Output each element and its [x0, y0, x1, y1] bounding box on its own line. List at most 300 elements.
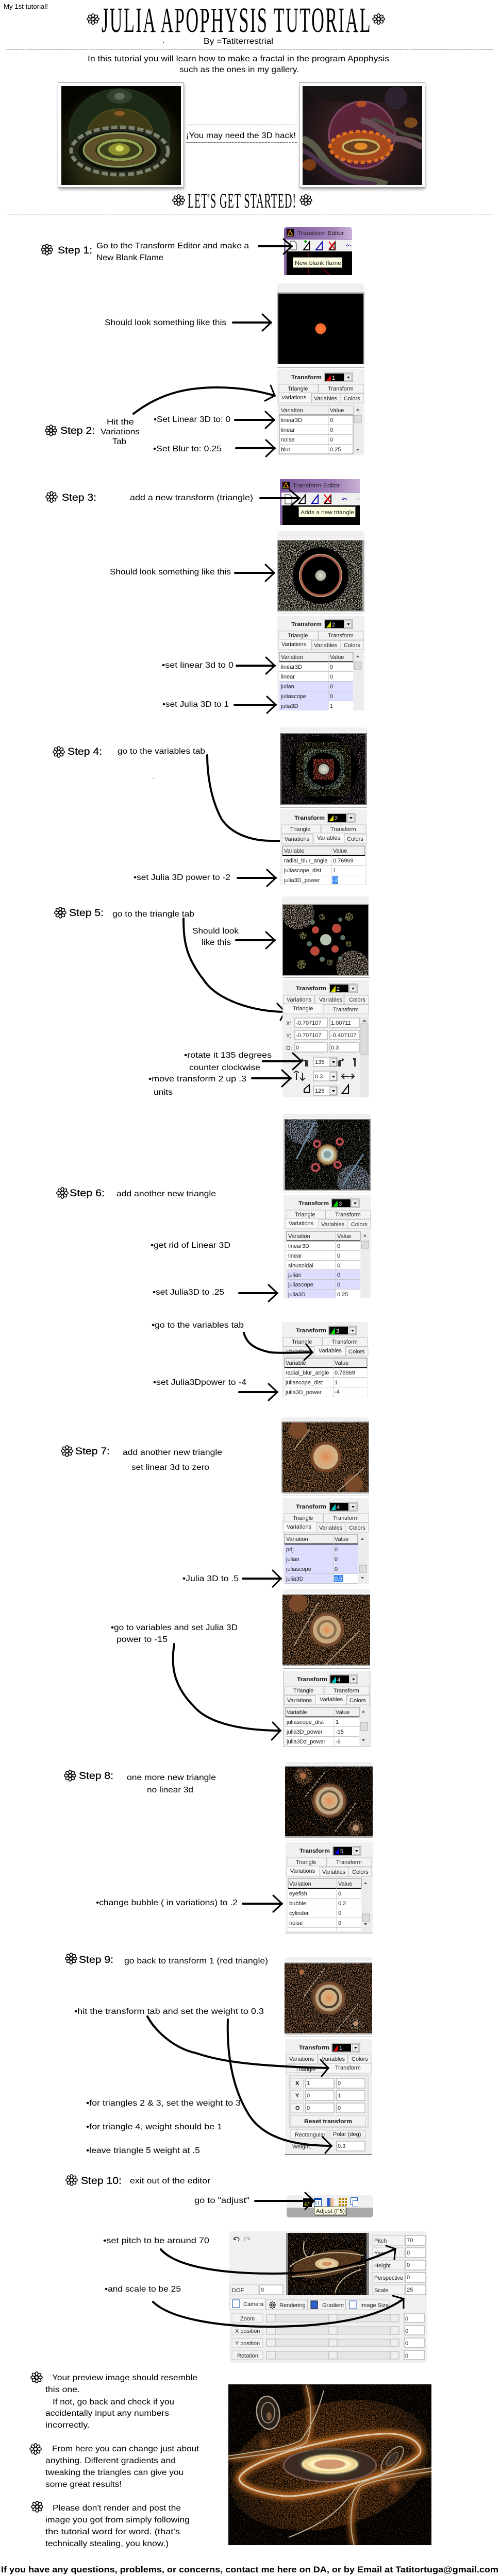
step 1 heading: Step 1: [58, 245, 92, 256]
panel: step 9 preview and transform tab: 0 [307, 2105, 310, 2111]
stray comma: , [163, 39, 164, 44]
panel: step 4 preview and variables: radial_blur_angle [284, 858, 327, 864]
panel: step 5 preview and triangle controls: Transform [333, 1007, 359, 1013]
panel: step 7 second preview and variables: Value [336, 1709, 349, 1716]
arrow: curved to weight field [228, 2020, 331, 2153]
panel: step 1 preview [277, 283, 364, 364]
panel: step 6 variables: Variables [319, 1348, 342, 1354]
panel: step 6 variables [282, 1322, 368, 1398]
panel: step 4 preview and variables: Transform [330, 826, 356, 833]
camera fields: Scale [374, 2287, 389, 2294]
panel: step 6 preview and variations: linear3D [288, 1243, 309, 1249]
stray dot [153, 778, 154, 779]
panel: step 7 preview and variations: Variations [287, 1524, 312, 1530]
panel: step 3 transform controls: Variation [281, 654, 303, 660]
panel: step 2 transform controls: Transform [328, 386, 354, 392]
panel: step 6 preview and variations: juliascope [288, 1282, 313, 1288]
panel: step 2 transform controls: linear [281, 427, 295, 433]
panel: step 9 preview and transform tab: Reset transform [304, 2119, 352, 2125]
step 8 heading: Step 8: [79, 1771, 113, 1782]
panel: step 6 preview and variations: 0 [337, 1243, 340, 1249]
note: please don't render: image you got from simply following [45, 2516, 190, 2524]
panel: step 3 transform controls: juliascope [280, 693, 306, 700]
bullet: rotate 135 degrees: counter clockwise [189, 1063, 260, 1072]
tilde divider: ~~~~~~~~~~~~~~~~~~~~~~~~~~~~~~~~~~~~~~~~~~~~~~~~~~~~~~~~~~~~~~~~~~~~~~~~~~~~~~~~~~~~~~~~~~~~~~~~~~~~~~~~~~~~~~~~~~~~~~~~~~~~~~~~~~~~~~~~~~~~~~~~~~~~~~~~~~~~~~~~ [6, 47, 494, 53]
camera fields: 0 [407, 2262, 410, 2268]
arrow: to rotate button [263, 1053, 302, 1070]
panel: step 3 transform controls: 0 [330, 684, 333, 690]
dialog tabs: Rendering [279, 2302, 306, 2309]
panel: step 8 preview and variations: cylinder [289, 1910, 309, 1917]
camera fields: 0 [407, 2250, 410, 2256]
panel: step 2 transform controls: 0 [330, 437, 333, 443]
preview: adjust fractal [286, 2233, 369, 2295]
panel: step 9 preview and transform tab: Variables [322, 2056, 345, 2062]
camera fields: Perspective [374, 2275, 403, 2281]
arrow: curved to scale field [153, 2296, 404, 2327]
panel: step 8 preview and variations: Variations [290, 1868, 315, 1874]
step 9 heading: Step 9: [79, 1955, 113, 1965]
step 6 heading: Step 6: [70, 1188, 105, 1199]
arrow: to preview [236, 932, 275, 948]
panel: step 8 preview and variations: Transform [299, 1848, 330, 1854]
arrow: to linear3D [237, 657, 275, 674]
arrow: to julia3D power [239, 1384, 277, 1400]
panel: step 2 transform controls [277, 365, 364, 455]
step 1 instruction: New Blank Flame [96, 253, 163, 262]
panel: step 7 preview and variations: Colors [349, 1525, 365, 1531]
note: change anything: tweaking the triangles can give you [45, 2468, 184, 2477]
panel: step 9 preview and transform tab: 1 [307, 2080, 310, 2087]
step 2 note: hit variations tab: Variations [101, 428, 140, 436]
note: preview should resemble: If not, go back and check if you [53, 2398, 174, 2406]
step 7 instruction: set linear 3d to zero [131, 1463, 209, 1472]
panel: step 5 preview and triangle controls: -0.707107 [296, 1032, 322, 1039]
note: preview should resemble: accidentally input any numbers [45, 2409, 169, 2418]
callout: 3D hack note: ¡You may need the 3D hack! [186, 131, 296, 140]
panel: step 9 preview and transform tab: Y [295, 2093, 299, 2099]
panel: step 3 transform controls: 1 [330, 703, 333, 709]
step 3 heading [46, 492, 96, 503]
panel: step 5 preview and triangle controls: 135 [315, 1059, 324, 1065]
sliders: 0 [405, 2328, 408, 2334]
camera fields: 70 [407, 2238, 413, 2244]
panel: step 8 preview and variations: 0 [338, 1910, 341, 1917]
byline: By =Tatiterrestrial [204, 37, 273, 46]
bullet: go to variables tab: •go to the variables tab [152, 1321, 244, 1330]
heading: let's get started: LET'S GET STARTED! [188, 189, 296, 212]
step 4 heading: Step 4: [68, 747, 102, 757]
panel: step 2 transform controls: noise [281, 437, 294, 443]
panel: step 7 second preview and variables: Variables [320, 1697, 343, 1703]
panel: step 6 preview and variations: julia3D [288, 1292, 306, 1298]
panel: step 7 second preview and variables: Transform [297, 1676, 327, 1683]
bullet: move transform 2: units [154, 1088, 173, 1097]
panel: step 9 preview and transform tab: 0 [307, 2093, 310, 2099]
note: please don't render: technically stealing, you know.) [45, 2539, 169, 2548]
intro text: In this tutorial you will learn how to make a fractal in the program Apophysis [88, 55, 389, 63]
panel: step 7 preview and variations: julia3D [286, 1576, 304, 1582]
panel: step 6 preview and variations: 0.25 [337, 1292, 348, 1298]
panel: step 3 transform controls: linear [281, 674, 295, 680]
panel: step 5 preview and triangle controls: 2 [337, 986, 340, 992]
panel: step 7 preview and variations: 0 [335, 1547, 338, 1553]
panel: step 7 second preview and variables: -6 [336, 1739, 341, 1745]
panel: step 7 preview and variations: 0.5 [335, 1576, 342, 1582]
panel: step 6 variables: 0.76969 [335, 1370, 355, 1376]
step 1 instruction [96, 242, 249, 262]
panel: step 8 preview and variations: 0.2 [338, 1901, 346, 1907]
bullet: set julia 3D power: •set Julia 3D power to -2 [134, 873, 230, 882]
label: should look like this: Should look [192, 927, 239, 936]
panel: step 7 second preview and variables: Triangle [293, 1688, 313, 1694]
sliders: Rotation [237, 2353, 258, 2359]
panel: step 5 preview and triangle controls: 125 [315, 1088, 324, 1094]
step 3 heading: Step 3: [62, 493, 96, 503]
note: please don't render: the tutorial word for word. (that's [45, 2528, 180, 2536]
step 7 instruction: add another new triangle [123, 1448, 222, 1457]
panel: step 3 transform controls: Variables [314, 642, 338, 649]
panel: step 6 preview and variations: 3 [339, 1201, 342, 1207]
panel: step 7 preview and variations: julian [286, 1556, 299, 1563]
sliders: 0 [405, 2341, 408, 2347]
contact line: If you have any questions, problems, or concerns, contact me here on DA, or by Email at Tatitortuga@gmail.com [1, 2565, 498, 2574]
note: preview should resemble [31, 2372, 197, 2430]
note: please don't render [31, 2501, 190, 2548]
panel: step 7 preview and variations: Triangle [293, 1515, 313, 1521]
panel: step 5 preview and triangle controls: Variations [287, 997, 312, 1003]
bullet: get rid of linear 3D: •get rid of Linear 3D [151, 1241, 230, 1250]
arrow: to new blank flame button [259, 239, 292, 254]
panel: step 3 transform controls: Value [330, 654, 344, 660]
screenshot: transform editor new blank flame: New blank flame [295, 260, 341, 266]
panel: step 7 second preview and variables: Variations [287, 1698, 312, 1704]
panel: step 4 preview and variables: Variations [285, 836, 310, 842]
panel: step 7 preview and variations [281, 1417, 369, 1584]
panel: step 2 transform controls: 0 [330, 417, 333, 423]
panel: step 8 preview and variations: Colors [352, 1869, 369, 1875]
bullet: move transform 2 [148, 1075, 246, 1097]
arrow: curved to variables tab [207, 755, 311, 849]
panel: step 3 transform controls: julia3D [280, 703, 298, 709]
arrow: to preview [233, 314, 271, 331]
bullet: go to variables and set julia 3D power: •go to variables and set Julia 3D [111, 1623, 238, 1632]
panel: step 9 preview and transform tab: Rectangular [295, 2132, 326, 2138]
bullet: julia 3D to .5: •Julia 3D to .5 [182, 1574, 239, 1583]
screenshot: transform editor add triangle [280, 479, 360, 525]
panel: step 4 preview and variables: Triangle [290, 826, 310, 833]
arrow: to linear3D [235, 412, 274, 428]
panel: step 5 preview and triangle controls: Variables [319, 997, 343, 1003]
panel: step 4 preview and variables: Transform [294, 815, 325, 821]
panel: step 8 preview and variations: Triangle [296, 1859, 316, 1866]
panel: step 6 variables: Value [335, 1360, 348, 1366]
intro text [88, 55, 389, 74]
panel: step 4 preview and variables: juliascope_dist [284, 868, 321, 874]
panel: step 7 preview and variations: 4 [337, 1504, 340, 1511]
panel: step 6 preview and variations: Variation [288, 1233, 310, 1240]
sliders: Zoom [240, 2316, 255, 2322]
panel: step 9 preview and transform tab: Polar (deg) [333, 2131, 361, 2138]
panel: step 5 preview and triangle controls: -0.707107 [296, 1020, 322, 1026]
screenshot: toolbar adjust button [287, 2195, 373, 2217]
panel: step 5 preview and triangle controls: Transform [296, 986, 326, 992]
bullet: go to variables and set julia 3D power [111, 1623, 238, 1644]
image: red orange julia fractal [299, 72, 425, 189]
panel: step 2 transform controls: Variations [281, 395, 307, 401]
camera fields: Yaw [374, 2250, 385, 2257]
step 2 note: hit variations tab [101, 418, 140, 446]
step 8 instruction: one more new triangle [127, 1773, 216, 1782]
panel: step 7 second preview and variables: 1 [336, 1719, 339, 1725]
panel: step 9 preview and transform tab: Transform [299, 2045, 329, 2051]
step 7 heading: Step 7: [75, 1446, 110, 1457]
panel: step 5 preview and triangle controls: Colors [349, 997, 365, 1003]
panel: step 3 transform controls [277, 611, 364, 710]
step 4 instruction: go to the variables tab [118, 747, 205, 756]
panel: step 6 variables: Transform [332, 1339, 358, 1345]
panel: step 9 preview and transform tab: Triangle [295, 2066, 315, 2073]
arrow: to adjust button [255, 2193, 314, 2209]
panel: adjust dialog [229, 2231, 427, 2363]
sliders: X position [235, 2328, 260, 2334]
label: should look like this [192, 927, 239, 947]
panel: step 6 variables: juliascope_dist [285, 1380, 323, 1386]
step 9 instruction: go back to transform 1 (red triangle) [124, 1957, 268, 1965]
panel: step 6 variables: Variable [286, 1360, 306, 1366]
screenshot: transform editor new blank flame [284, 227, 352, 275]
panel: step 2 transform controls: Variation [281, 408, 303, 414]
sliders [232, 2313, 424, 2360]
intro text: such as the ones in my gallery. [179, 65, 299, 74]
panel: step 9 preview and transform tab [285, 1957, 372, 2155]
camera fields: 0 [407, 2275, 410, 2281]
panel: step 6 variables: 3 [336, 1328, 339, 1334]
panel: step 9 preview and transform tab: Variations [289, 2056, 314, 2062]
panel: step 7 preview and variations: Variables [319, 1525, 343, 1531]
sliders: 0 [405, 2316, 408, 2322]
bullet: set linear 3D: •Set Linear 3D to: 0 [154, 415, 230, 424]
panel: step 7 preview and variations: Transform [296, 1504, 326, 1510]
panel: step 4 preview and variables: Variable [284, 848, 305, 854]
panel: step 7 second preview and variables: Variable [287, 1709, 307, 1716]
panel: step 2 transform controls: Value [330, 408, 344, 414]
step 2 heading: Step 2: [60, 426, 95, 436]
panel: step 6 preview and variations: sinusoidal [288, 1263, 313, 1269]
panel: step 5 preview and triangle controls: 0.3 [315, 1074, 323, 1080]
panel: step 8 preview and variations: eyefish [289, 1891, 307, 1897]
panel: step 3 transform controls: Transform [291, 621, 322, 628]
label: should look like this: Should look something like this [110, 568, 231, 577]
panel: step 4 preview and variables: julia3D_power [284, 877, 320, 884]
panel: step 5 preview and triangle controls: O: [286, 1045, 292, 1052]
panel: step 3 transform controls: julian [280, 684, 294, 690]
panel: step 4 preview and variables: Variables [317, 835, 341, 841]
panel: step 6 variables: radial_blur_angle [286, 1370, 329, 1376]
dialog tabs [229, 2298, 389, 2310]
panel: step 3 transform controls: 0 [330, 674, 333, 680]
step 7 heading [61, 1446, 110, 1457]
bullet: hit transform tab and set weight: •hit the transform tab and set the weight to 0.3 [74, 2007, 264, 2016]
tilde divider: ~~~~~~~~~~~~~~~~~~~~~~~~~~~~~~~~~~~~~~~~~~~~~~~~~~~~~~~~~~~~~~~~~~~~~~~~~~~~~~~~~~~~~~~~~~~~~~~~~~~~~~~~~~~~~~~~~~~~~~~~~~~~~~~~~~~~~~~~~~~~~~~~~~~~~~~~~~~~~~~~ [7, 212, 494, 217]
bullet: rotate 135 degrees: •rotate it 135 degrees [184, 1051, 272, 1060]
arrow: curved to variables tab [244, 1333, 312, 1360]
arrow: curved to transform tab [147, 2016, 328, 2076]
panel: step 8 preview and variations: Variables [322, 1869, 346, 1875]
note: change anything: From here you can change just about [52, 2445, 199, 2453]
panel: step 4 preview and variables: 0.76969 [333, 858, 354, 864]
panel: step 7 preview and variations: Transform [333, 1515, 359, 1521]
panel: step 7 preview and variations: 0 [335, 1566, 338, 1572]
panel: step 6 preview and variations: 0 [337, 1272, 340, 1278]
panel: step 6 preview and variations [282, 1111, 371, 1298]
panel: step 3 transform controls: linear3D [281, 664, 302, 670]
panel: step 3 transform controls: Colors [344, 642, 360, 649]
bullet: change bubble: •change bubble ( in variations) to .2 [96, 1899, 238, 1907]
step 6 heading [57, 1188, 105, 1199]
note: change anything [30, 2444, 199, 2489]
panel: step 8 preview and variations: Transform [336, 1859, 362, 1866]
step 5 heading: Step 5: [69, 908, 104, 919]
panel: step 6 variables: -4 [335, 1389, 340, 1395]
step 8 instruction: no linear 3d [147, 1786, 193, 1794]
arrow: to julia3D [239, 1285, 277, 1301]
step 2 note: hit variations tab: Hit the [107, 418, 134, 427]
panel: step 7 preview and variations: 0 [335, 1556, 338, 1563]
panel: step 9 preview and transform tab: 0 [338, 2080, 341, 2087]
note: preview should resemble: Your preview image should resemble [52, 2374, 197, 2382]
step 8 instruction [127, 1773, 216, 1794]
panel: step 2 transform controls: Triangle [288, 386, 308, 392]
arrow: to blur [236, 440, 275, 456]
panel: step 8 preview and variations: Variation [289, 1881, 311, 1887]
panel: step 9 preview and transform tab: 0 [338, 2105, 341, 2111]
panel: step 7 preview and variations: Variation [286, 1536, 308, 1543]
bullet: triangle 4 weight: •for triangle 4, weight should be 1 [86, 2123, 222, 2131]
panel: step 3 transform controls: 0 [330, 664, 333, 670]
bullet: set linear 3d: •set linear 3d to 0 [162, 661, 234, 670]
panel: step 7 second preview and variables: Colors [349, 1698, 366, 1704]
arrow: to julia3D [235, 697, 276, 713]
dialog tabs: Gradient [322, 2302, 344, 2309]
undo redo icons [234, 2237, 249, 2241]
callout: 3D hack note: ~~~~~~~~~~~~~~~~~~~~~~~~~~~~~~~~~~~~~ [186, 123, 297, 128]
label: go to adjust: go to "adjust" [194, 2196, 249, 2205]
panel: step 5 preview and triangle controls: X: [286, 1021, 291, 1027]
bullet: set julia3D to .25: •set Julia3D to .25 [153, 1288, 224, 1297]
panel: step 2 transform controls: 1 [332, 375, 335, 381]
panel: step 2 transform controls: linear3D [281, 417, 302, 423]
panel: step 9 preview and transform tab: 0.3 [338, 2143, 345, 2149]
step 2 note: hit variations tab: Tab [112, 437, 126, 446]
screenshot: toolbar adjust button: Adjust (F5) [316, 2208, 345, 2214]
panel: step 6 preview and variations: 0 [337, 1263, 340, 1269]
sliders: Y position [235, 2341, 260, 2347]
panel: step 6 preview and variations: Variations [289, 1221, 314, 1227]
note: change anything: anything. Different gradients and [45, 2456, 176, 2465]
bullet: and scale: •and scale to be 25 [105, 2285, 181, 2294]
step 6 instruction: add another new triangle [116, 1190, 216, 1198]
panel: step 6 preview and variations: Colors [351, 1222, 368, 1228]
panel: step 6 preview and variations: Variables [321, 1222, 345, 1228]
heading: let's get started [173, 189, 312, 212]
panel: step 8 preview and variations: 5 [340, 1849, 343, 1855]
panel: step 8 preview and variations: Value [338, 1881, 352, 1887]
bullet: triangles 2 and 3 weight: •for triangles 2 & 3, set the weight to 3 [86, 2099, 241, 2108]
panel: step 9 preview and transform tab: Colors [352, 2056, 368, 2062]
bullet: set julia 3D: •set Julia 3D to 1 [162, 700, 229, 709]
arrow: curved to triangle tab [184, 919, 285, 1020]
bullet: triangle 5 weight: •leave triangle 5 weight at .5 [86, 2146, 200, 2155]
bullet: move transform 2: •move transform 2 up .3 [148, 1075, 246, 1083]
arrow: curved to julia3D power [173, 1644, 280, 1740]
screenshot: transform editor add triangle: Adds a new triangle [301, 510, 354, 516]
panel: step 5 preview and triangle controls: -0.407107 [331, 1032, 357, 1039]
panel: step 6 preview and variations: Value [337, 1233, 351, 1240]
panel: step 6 preview and variations: Transform [298, 1200, 329, 1207]
panel: step 7 second preview and variables: juliascope_dist [286, 1719, 324, 1725]
panel: step 5 preview and triangle controls: Y: [286, 1033, 291, 1039]
bullet: set julia3D power: •set Julia3Dpower to -4 [153, 1378, 246, 1387]
panel: step 9 preview and transform tab: 1 [338, 2093, 341, 2099]
panel: step 6 preview and variations: julian [288, 1272, 302, 1278]
camera fields: Height [374, 2263, 391, 2269]
camera fields: 25 [407, 2287, 413, 2293]
bullet: rotate 135 degrees [184, 1051, 272, 1072]
panel: step 6 variables: Variations [286, 1349, 311, 1355]
panel: step 9 preview and transform tab: 1 [339, 2045, 342, 2052]
note: preview should resemble: incorrectly. [45, 2421, 90, 2430]
step 10 instruction: exit out of the editor [130, 2177, 211, 2185]
panel: step 5 preview and triangle controls: 0.3 [331, 1045, 339, 1051]
panel: step 5 preview and triangle controls: 0 [296, 1045, 299, 1051]
panel: step 5 preview and triangle controls: 1.00711 [331, 1020, 351, 1026]
panel: step 6 preview and variations: linear [288, 1253, 302, 1259]
panel: step 8 preview and variations: 0 [338, 1920, 341, 1926]
image: final rendered fractal [228, 2384, 431, 2545]
step 2 heading [45, 425, 95, 436]
callout: 3D hack note: ~~~~~~~~~~~~~~~~~~~~~~~~~~~~~~~~~~~~~ [186, 140, 297, 146]
panel: step 7 second preview and variables: julia3Dz_power [286, 1739, 326, 1745]
step 5 heading [55, 907, 104, 919]
note: change anything: some great results! [45, 2480, 122, 2489]
arrow: to preview [235, 565, 274, 581]
panel: step 8 preview and variations: 0 [338, 1891, 341, 1897]
panel: step 8 preview and variations: bubble [289, 1901, 306, 1907]
panel: step 3 transform controls: Triangle [288, 633, 308, 639]
arrow: curved to pitch field [161, 2246, 395, 2274]
arrow: to bubble [243, 1895, 282, 1912]
step 5 instruction: go to the triangle tab [112, 910, 194, 919]
note: please don't render: Please don't render and post the [53, 2504, 181, 2513]
panel: step 9 preview and transform tab: Weight: [292, 2144, 311, 2150]
note: preview should resemble: this one. [45, 2385, 80, 2394]
panel: step 3 transform controls: Variations [281, 641, 307, 648]
panel: step 5 preview and triangle controls: Triangle [293, 1006, 313, 1012]
panel: step 6 variables: Transform [296, 1328, 326, 1334]
label: should look like this: Should look something like this [105, 318, 226, 327]
label: should look like this: like this [202, 938, 231, 947]
camera fields: DOF [232, 2287, 244, 2294]
panel: step 6 variables: Colors [348, 1349, 365, 1355]
camera fields: 0 [261, 2287, 264, 2293]
arrow: to julia3D [243, 1570, 281, 1587]
title [87, 1, 385, 40]
panel: step 7 preview and variations: Value [335, 1536, 348, 1543]
bullet: set blur: •Set Blur to: 0.25 [153, 445, 222, 453]
step 8 heading [64, 1770, 113, 1782]
panel: step 7 preview and variations: juliascope [286, 1566, 311, 1572]
